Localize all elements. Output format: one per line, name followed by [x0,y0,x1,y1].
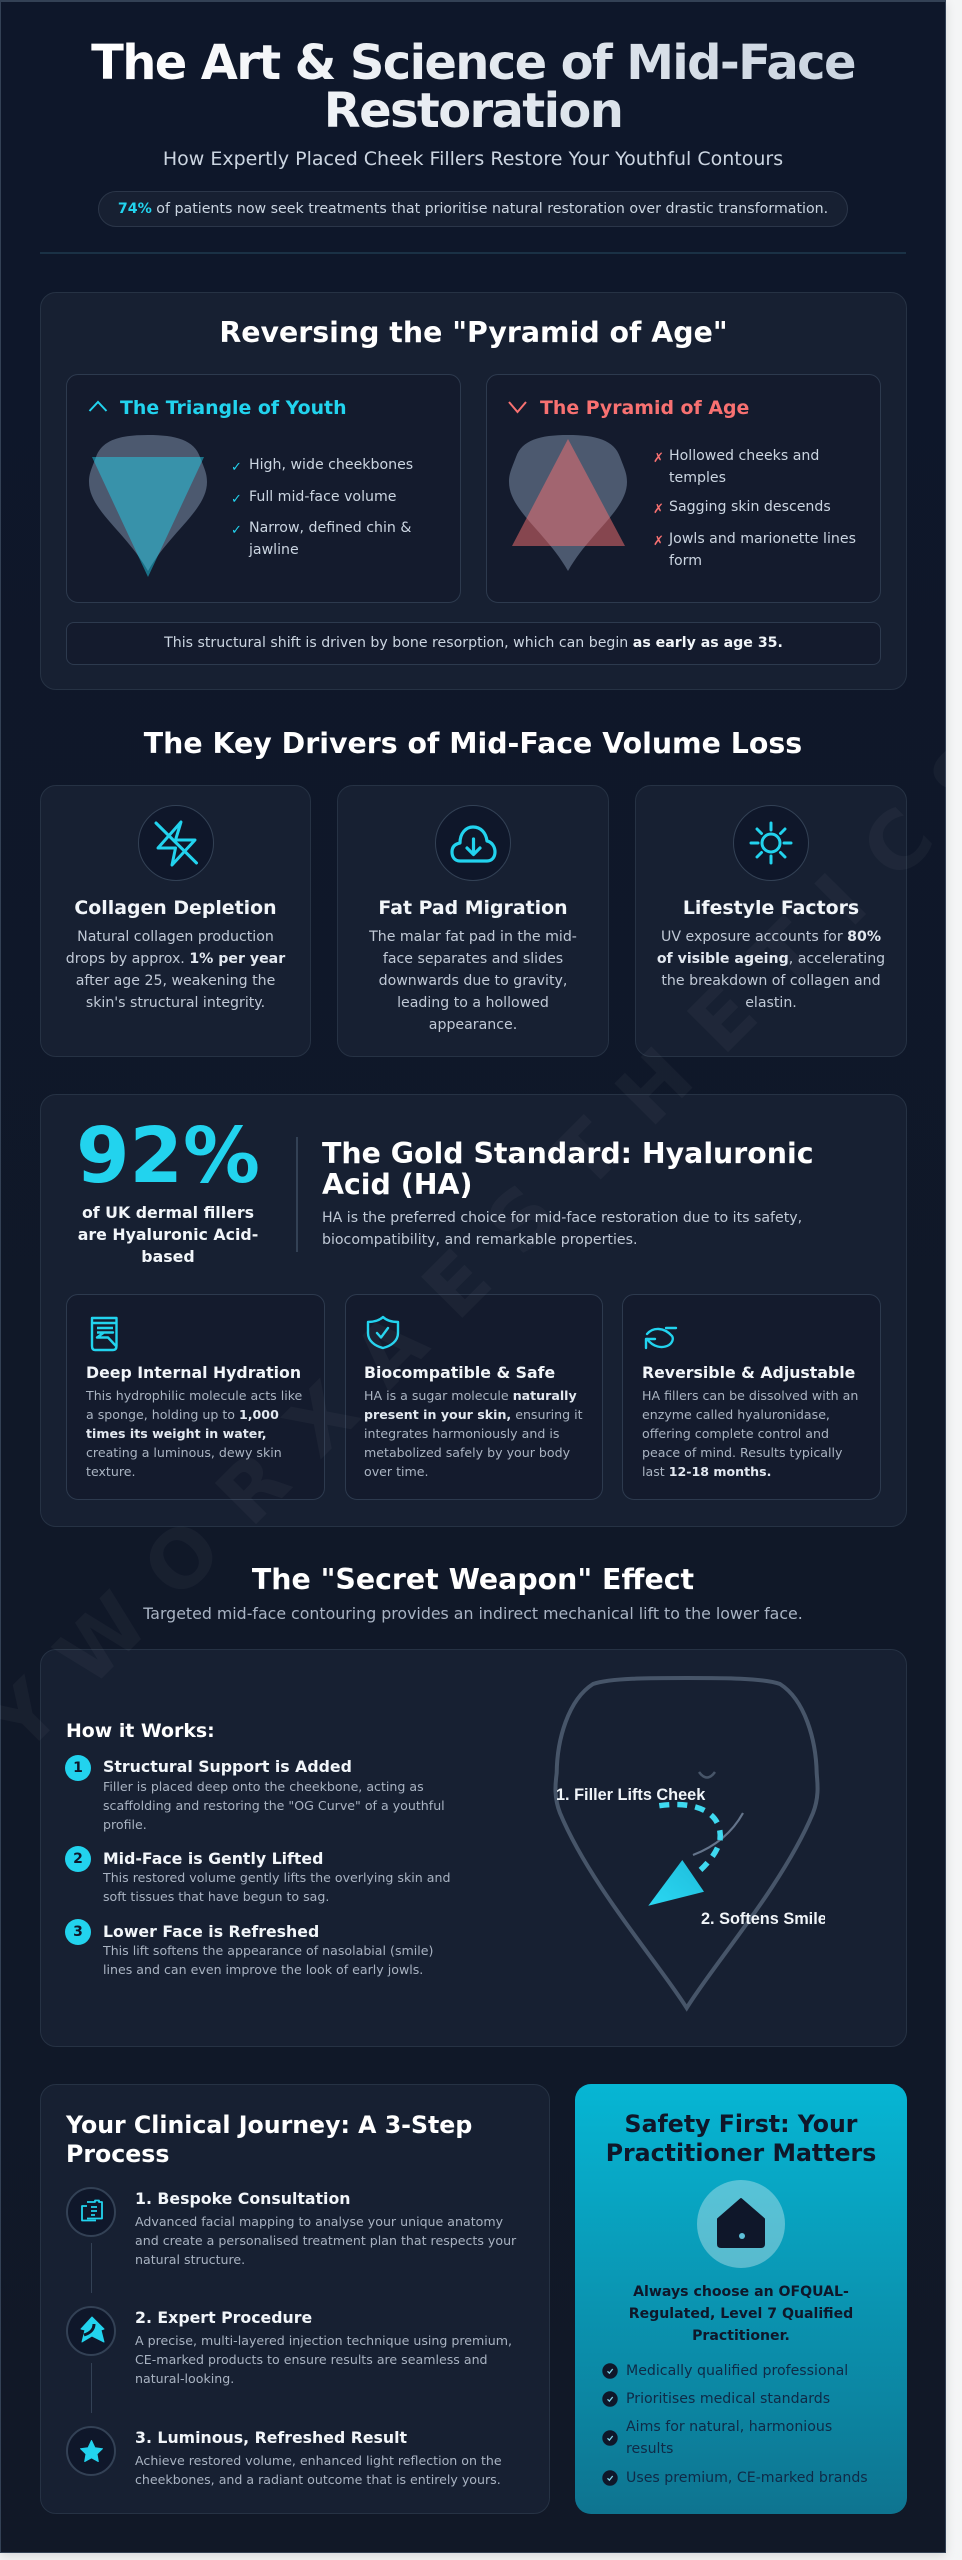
stat caption: based [141,1247,195,1266]
icon: sun [733,805,809,881]
step 2 text: CE-marked products to ensure results are seamless and [135,2352,488,2366]
panel: collagen depletion [40,785,311,1057]
badge 2: 2 [73,1851,83,1867]
text: This hydrophilic molecule acts like [86,1388,302,1403]
step 3 title: 3. Luminous, Refreshed Result [135,2428,407,2447]
list: ageing features: temples [669,470,726,486]
badge 1 [65,1755,91,1781]
text: after age 25, weakening the [76,973,275,989]
heading: Reversible & Adjustable [642,1363,855,1382]
text [66,929,286,1011]
panel: pyramid of age [40,292,907,690]
list: ageing features: ✗ [653,451,664,466]
step 1 text: Filler is placed deep onto the cheekbone, acting as [103,1778,424,1794]
stat caption: are Hyaluronic Acid- [78,1225,258,1244]
heading: Biocompatible & Safe [364,1363,555,1382]
text: offering complete control and [642,1426,829,1441]
text: leading to a hollowed [397,995,549,1011]
step 1 text: natural structure. [135,2252,245,2266]
step 2 title: Mid-Face is Gently Lifted [103,1849,323,1868]
heading: reversing the pyramid of age: Reversing the "Pyramid of Age" [219,316,728,349]
list: youth features: ✓ [231,460,242,475]
step 2 text [102,1870,450,1904]
text: the breakdown of collagen and [661,973,881,989]
text: times its weight in water, [86,1426,266,1441]
text [657,929,885,1011]
checklist: Medically qualified professional [626,2363,848,2379]
list: ageing features: Jowls and marionette lines [669,531,856,547]
title [60,39,886,135]
stat caption [78,1203,258,1266]
icon: star [66,2426,116,2476]
heading: safety first: Safety First: Your [625,2110,857,2138]
step 3 text [102,1942,433,1976]
step 2 text: natural-looking. [135,2370,234,2386]
panel: reversible and adjustable [622,1294,881,1500]
checklist: Uses premium, CE-marked brands [626,2470,868,2486]
panel: lifestyle factors [635,785,907,1057]
text: texture. [86,1464,136,1479]
text: The malar fat pad in the mid- [369,929,577,945]
list: youth features: Full mid-face volume [249,489,396,505]
stat: 92%: 92% [76,1112,260,1201]
icon: reverse arrows [644,1326,678,1350]
text: intro: HA is the preferred choice for mid-face restoration due to its safety, [322,1210,802,1226]
note: bone resorption [66,622,881,665]
step 1 text: scaffolding and restoring the "OG Curve" of a youthful [103,1798,445,1812]
heading: clinical journey: Process [66,2140,169,2168]
text: Natural collagen production [77,929,274,945]
text: enzyme called hyaluronidase, [642,1407,830,1422]
text: last 12-18 months. [642,1464,771,1479]
panel: triangle of youth [66,374,461,603]
text: peace of mind. Results typically [642,1445,842,1460]
panel: safety first [575,2084,907,2514]
step 3 text: This lift softens the appearance of nasolabial (smile) [103,1942,433,1958]
icon: cloud download [435,805,511,881]
step 3 text: cheekbones, and a radiant outcome that is entirely yours. [135,2472,501,2486]
text: HA is a sugar molecule naturally [364,1388,577,1403]
step 2 title: 2. Expert Procedure [135,2308,312,2327]
heading: gold standard [322,1137,814,1201]
checklist [602,2363,868,2486]
step 2 text: This restored volume gently lifts the overlying skin and [103,1870,450,1884]
badge 3 [65,1919,91,1945]
panel: biocompatible and safe [345,1294,603,1500]
step 2 text [135,2332,512,2386]
text: metabolized safely by your body [364,1445,570,1460]
step 1 text [103,1778,445,1832]
panel: hyaluronic acid gold standard [40,1094,907,1527]
heading: safety first: Practitioner Matters [606,2139,876,2167]
subheading: secret weapon: Targeted mid-face contouring provides an indirect mechanical lift to the lower face. [143,1604,803,1623]
checklist: results [626,2441,673,2457]
heading: clinical journey: Your Clinical Journey: A 3-Step [66,2110,472,2138]
step 3 title: Lower Face is Refreshed [103,1922,319,1941]
diagram: aged face with pyramid [509,435,627,571]
heading: secret weapon: The "Secret Weapon" Effect [252,1563,694,1596]
panel: fat pad migration [337,785,609,1057]
text [642,1388,858,1479]
text: present in your skin, ensuring it [364,1407,583,1422]
list: ageing features: ✗ [653,534,664,549]
checklist: Prioritises medical standards [626,2391,830,2407]
text: drops by approx. 1% per year [66,951,285,967]
badge 2 [65,1846,91,1872]
text: appearance. [429,1017,517,1033]
badge 3: 3 [73,1924,83,1940]
text [369,929,577,1033]
callout text: Practitioner. [692,2328,790,2344]
heading: pyramid of age: The Pyramid of Age [540,397,749,419]
subtitle: How Expertly Placed Cheek Fillers Restore Your Youthful Contours [163,148,783,170]
diagram: youthful face with inverted triangle [89,435,207,577]
heading: gold standard: The Gold Standard: Hyaluronic [322,1137,814,1170]
heading: Lifestyle Factors [683,897,859,919]
text: integrates harmoniously and is [364,1426,559,1441]
note: bone resorption: This structural shift is driven by bone resorption, which can begin as early as age 35. [164,635,783,651]
diagram: face lift: 1. Filler Lifts Cheek [556,1786,706,1804]
icon: expert star [66,2306,116,2356]
diagram: face lift: 2. Softens Smile Lines [701,1910,874,1928]
step 3 text: Achieve restored volume, enhanced light reflection on the [135,2452,502,2468]
list: ageing features: Hollowed cheeks and [669,448,819,464]
text: UV exposure accounts for 80% [661,929,881,945]
step 1 text: and create a personalised treatment plan that respects your [135,2232,516,2248]
step 1 text [135,2214,516,2266]
heading: clinical journey [66,2110,472,2168]
list: youth features [231,457,413,558]
heading: Fat Pad Migration [378,897,568,919]
text [86,1388,302,1479]
stat pill: 74%: 74% of patients now seek treatments that prioritise natural restoration over drastic transformation. [118,201,828,217]
icon: clipboard [66,2187,116,2237]
list: ageing features [653,448,856,569]
step 3 text: lines and can even improve the look of early jowls. [103,1962,423,1976]
text: HA fillers can be dissolved with an [642,1388,858,1403]
text: over time. [364,1464,429,1479]
text: intro [322,1210,802,1248]
stat pill: 74% [98,191,848,227]
heading: safety first [606,2110,876,2167]
diagram: face lift [554,1676,825,2012]
icon: shield check [366,1316,400,1350]
callout text [629,2284,853,2344]
title: Restoration [324,83,622,139]
callout text: Regulated, Level 7 Qualified [629,2306,853,2322]
text [364,1388,583,1479]
text: a sponge, holding up to 1,000 [86,1407,279,1422]
text: skin's structural integrity. [86,995,265,1011]
heading: Deep Internal Hydration [86,1363,301,1382]
icon: chevron down [508,401,527,414]
heading: Collagen Depletion [74,897,277,919]
step 2 text: soft tissues that have begun to sag. [103,1888,329,1904]
list: youth features: jawline [249,542,299,558]
checklist: Aims for natural, harmonious [626,2419,832,2435]
text: creating a luminous, dewy skin [86,1445,282,1460]
panel: how it works [40,1649,907,2047]
step 1 title: 1. Bespoke Consultation [135,2189,350,2208]
title: The Art & Science of Mid-Face [91,35,855,91]
heading: key drivers: The Key Drivers of Mid-Face Volume Loss [144,727,802,760]
step 1 text: Advanced facial mapping to analyse your unique anatomy [135,2214,503,2228]
panel: clinical journey [40,2084,550,2514]
list: youth features: Narrow, defined chin & [249,520,411,536]
icon: chevron up [88,400,108,412]
text: elastin. [745,995,797,1011]
list: ageing features: ✗ [653,502,664,517]
icon: document [90,1316,118,1352]
step 1 text: profile. [103,1816,147,1832]
step 1 title: Structural Support is Added [103,1757,352,1776]
callout text: Always choose an OFQUAL- [633,2284,849,2300]
panel: pyramid of age comparison [486,374,881,603]
text: intro: biocompatibility, and remarkable properties. [322,1232,637,1248]
step 3 text [135,2452,502,2486]
text: of visible ageing, accelerating [657,951,885,967]
stat caption: of UK dermal fillers [82,1203,254,1222]
step 2 text: A precise, multi-layered injection technique using premium, [135,2332,512,2348]
list: youth features: High, wide cheekbones [249,457,413,473]
list: youth features: ✓ [231,492,242,507]
list: ageing features: Sagging skin descends [669,499,831,515]
icon: house in circle [697,2180,785,2268]
heading: triangle of youth: The Triangle of Youth [120,397,347,419]
heading: how it works: How it Works: [66,1720,215,1742]
list: youth features: ✓ [231,523,242,538]
badge 1: 1 [73,1760,83,1776]
text: face separates and slides [383,951,563,967]
icon: zap off [138,805,214,881]
heading: gold standard: Acid (HA) [322,1168,472,1201]
list: ageing features: form [669,553,702,569]
panel: deep internal hydration [66,1294,325,1500]
text: downwards due to gravity, [379,973,567,989]
